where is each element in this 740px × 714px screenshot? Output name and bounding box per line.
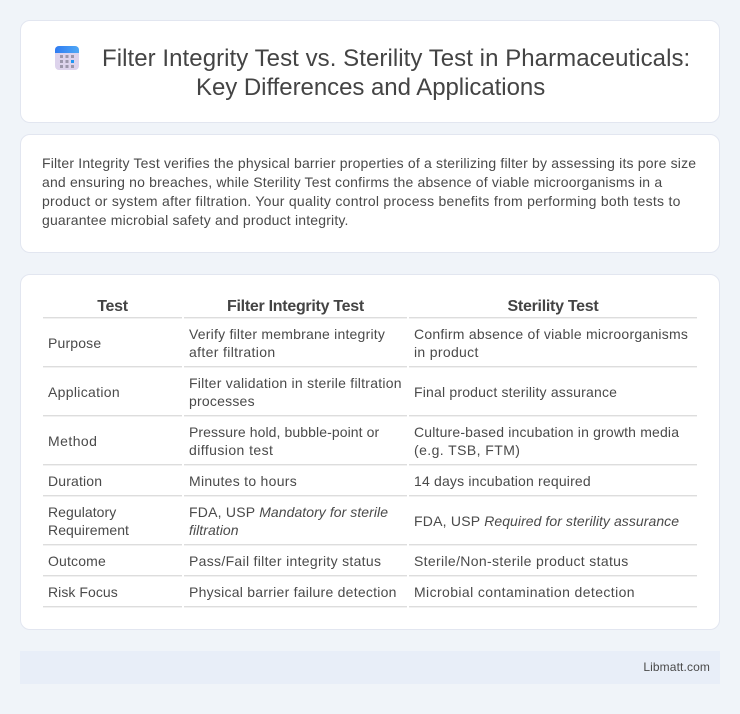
row: Duration (48, 473, 591, 489)
intro paragraph (42, 155, 696, 228)
table header: Sterility Test: Sterility Test (508, 298, 598, 315)
row: Application: Filter validation in sterile filtration (189, 375, 402, 391)
row: Purpose: in product (414, 344, 479, 360)
row: Duration: Minutes to hours (189, 473, 297, 489)
title (102, 45, 690, 101)
panel: intro text (20, 134, 720, 253)
intro paragraph: Filter Integrity Test verifies the physical barrier properties of a sterilizing filter by assessing its pore size (42, 155, 696, 171)
row: Regulatory Requirement: Regulatory (48, 504, 116, 520)
row: Outcome (48, 553, 629, 569)
intro paragraph: guarantee microbial safety and product integrity. (42, 212, 349, 228)
row: Duration: 14 days incubation required (414, 473, 591, 489)
row: Purpose: after filtration (189, 344, 276, 360)
footer (20, 651, 720, 684)
row: Risk Focus: Risk Focus (48, 584, 118, 600)
row: Application (48, 375, 617, 409)
row: Duration: Duration (48, 473, 102, 489)
row: Purpose: Verify filter membrane integrity (189, 326, 385, 342)
row: Method: (e.g. TSB, FTM) (414, 442, 520, 458)
table header: Filter Integrity Test: Filter Integrity Test (227, 298, 364, 315)
icon: calendar (55, 46, 79, 70)
row: Regulatory Requirement: Requirement (48, 522, 129, 538)
intro paragraph: and ensuring no breaches, while Sterility Test confirms the absence of viable microorganisms in a (42, 174, 662, 190)
row: Method: diffusion test (189, 442, 273, 458)
row: Risk Focus (48, 584, 635, 600)
row: Regulatory Requirement: FDA, USP Mandatory for sterile (189, 504, 388, 520)
row: Risk Focus: Physical barrier failure detection (189, 584, 397, 600)
row: Application: processes (189, 393, 255, 409)
row: Regulatory Requirement: FDA, USP Required for sterility assurance (414, 513, 679, 529)
row: Method: Method (48, 433, 97, 449)
row: Method: Pressure hold, bubble-point or (189, 424, 379, 440)
title: Key Differences and Applications (196, 74, 545, 101)
row: Purpose (48, 326, 688, 360)
footer text: Libmatt.com: Libmatt.com (643, 660, 710, 674)
row: Outcome: Pass/Fail filter integrity status (189, 553, 381, 569)
table header: Test: Test (97, 298, 128, 315)
title: Filter Integrity Test vs. Sterility Test in Pharmaceuticals: (102, 45, 690, 72)
row: Method: Culture-based incubation in growth media (414, 424, 679, 440)
row: Outcome: Sterile/Non-sterile product status (414, 553, 629, 569)
row: Regulatory Requirement: filtration (189, 522, 239, 538)
row: Risk Focus: Microbial contamination detection (414, 584, 635, 600)
row: Outcome: Outcome (48, 553, 106, 569)
intro paragraph: product or system after filtration. Your quality control process benefits from performing both tests to (42, 193, 681, 209)
row: Purpose: Confirm absence of viable microorganisms (414, 326, 688, 342)
panel: comparison table (20, 274, 720, 630)
row: Regulatory Requirement (48, 504, 679, 538)
row: Application: Final product sterility assurance (414, 384, 617, 400)
panel: header (20, 20, 720, 123)
row: Application: Application (48, 384, 120, 400)
row: Purpose: Purpose (48, 335, 101, 351)
row: Method (48, 424, 680, 458)
